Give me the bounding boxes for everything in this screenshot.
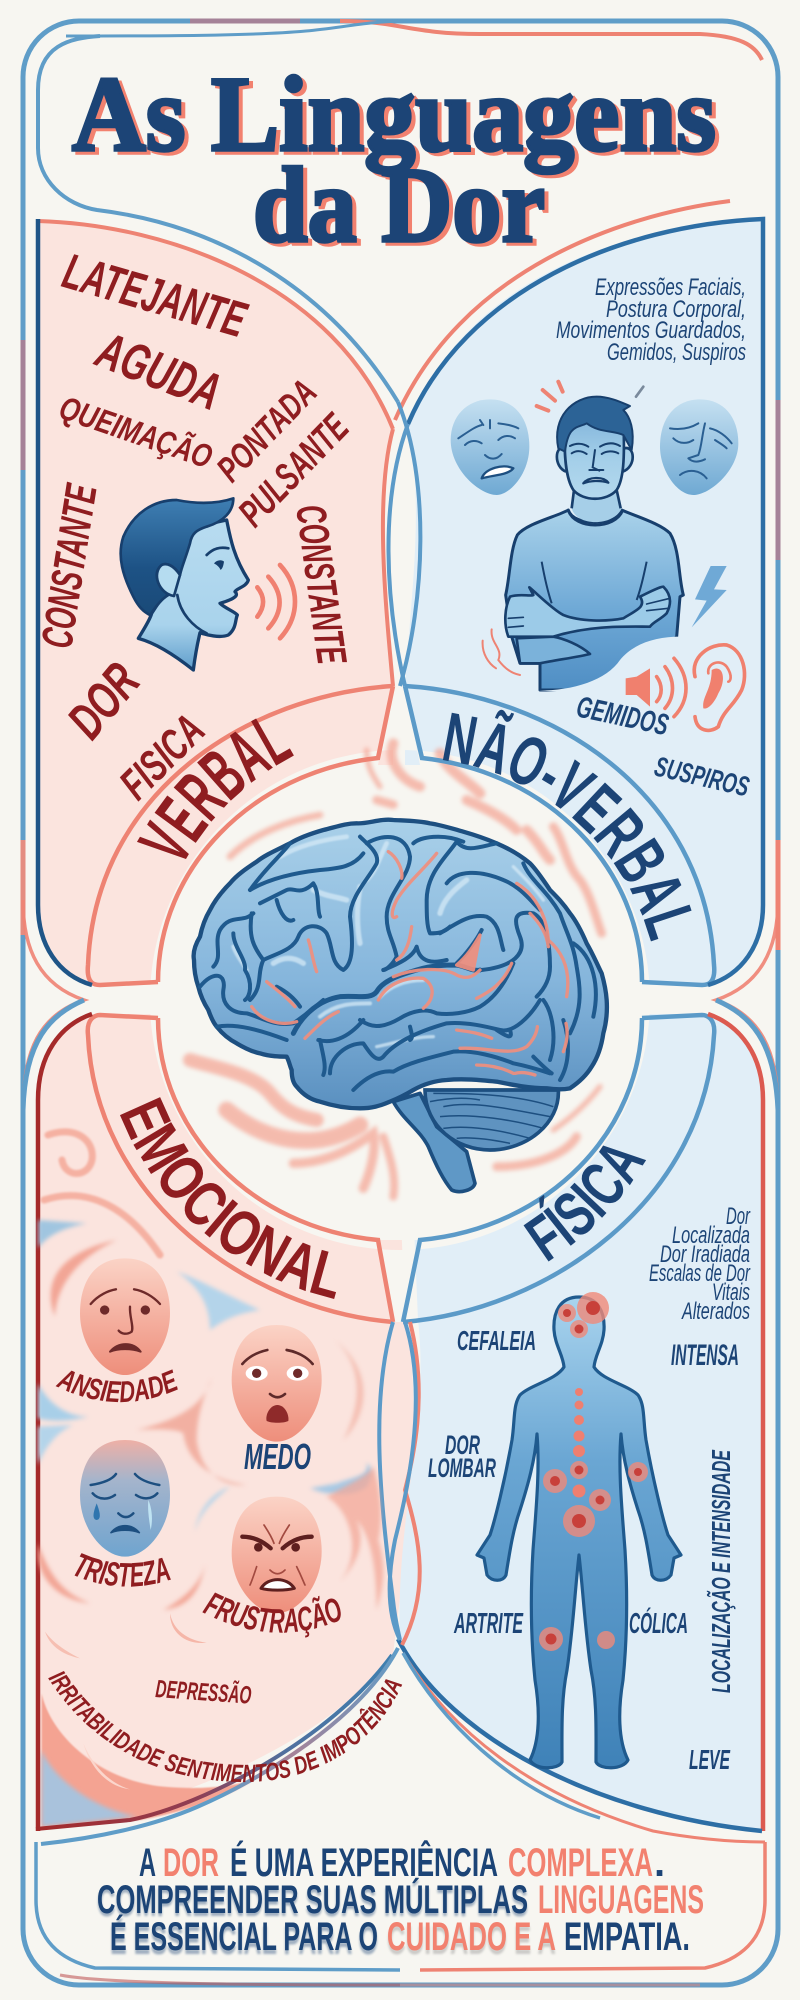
title: main text: As Linguagens [72, 56, 716, 174]
emotion labels: TRISTEZA [74, 1553, 171, 1587]
ring: physical arc [403, 1015, 714, 1322]
physical labels: LEVE [689, 1744, 731, 1775]
brain: main silhouette [194, 820, 607, 1108]
panel: non-verbal background [405, 219, 763, 985]
physical labels: ARTRITE [453, 1608, 524, 1640]
physical labels: INTENSA [671, 1339, 739, 1372]
emotion labels: DEPRESSÃO [155, 1673, 253, 1710]
ring: emotional arc [88, 1015, 393, 1322]
footer text: line one: A [139, 1841, 156, 1885]
brain: folds [200, 837, 596, 1090]
title: shadow [76, 59, 720, 268]
non-verbal description [556, 274, 746, 366]
footer text: ghost shadow: É ESSENCIAL PARA O [110, 1918, 378, 1963]
man: fingers [508, 598, 670, 627]
man: face [565, 420, 624, 499]
physical labels: DOR [445, 1430, 480, 1460]
footer text: line three: CUIDADO E A [387, 1915, 556, 1959]
title: shadow: da Dor [257, 150, 549, 268]
physical description: Alterados [681, 1298, 750, 1325]
physical description: Dor Iradiada [660, 1241, 750, 1268]
verbal word cloud: QUEIMAÇÃO [55, 389, 217, 475]
head: skin [138, 520, 248, 670]
icon: sound waves from mouth [257, 565, 295, 638]
man: crossed arms [505, 587, 670, 637]
centre cream circle and wedges [84, 686, 716, 1322]
icon: ear [694, 645, 745, 730]
panel: physical background [400, 1014, 763, 1831]
emotion labels: ANSIEDADE [56, 1369, 178, 1402]
footer text: ghost shadow: COMPREENDER SUAS MÚLTIPLAS [97, 1879, 528, 1925]
wisps around the brain [190, 743, 602, 1197]
footer text: ghost shadow: CUIDADO E A [387, 1919, 556, 1963]
panel: emotional background [38, 1014, 413, 1831]
physical description: Vitais [712, 1279, 750, 1306]
icon: speaking head [121, 498, 295, 670]
icon: brain [194, 820, 607, 1192]
footer text: line one: COMPLEXA [508, 1841, 653, 1885]
panel: footer box [36, 1842, 765, 1985]
title [72, 56, 720, 268]
physical labels [428, 1325, 739, 1775]
man: neck [572, 488, 622, 522]
icon: body outline with pain points [477, 1292, 681, 1768]
head: ear [157, 564, 180, 596]
face: sadness [80, 1440, 170, 1557]
footer text: line three: EMPATIA. [564, 1915, 690, 1959]
footer text: line one: É UMA EXPERIÊNCIA [230, 1839, 498, 1885]
ring label: verbal: VERBAL [137, 718, 294, 859]
brain: stem [393, 1093, 475, 1192]
verbal word cloud: PULSANTE [231, 406, 358, 535]
brain: pain veins [252, 852, 568, 1075]
emotion labels [48, 1369, 402, 1782]
non-verbal description: Postura Corporal, [606, 296, 746, 323]
head: jaw, brow and eye [177, 548, 228, 633]
swirl: frustration tail [170, 1613, 207, 1643]
man: collar line [568, 490, 623, 525]
swirl: corner blue wash [42, 1750, 137, 1827]
body: silhouette [477, 1297, 681, 1768]
label: medo: MEDO [244, 1436, 311, 1477]
ring label: emocional: EMOCIONAL [120, 1097, 336, 1299]
icon: lightning bolt [692, 566, 727, 627]
non-verbal labels: SUSPIROS [652, 751, 752, 802]
footer text: line one: DOR [163, 1841, 219, 1885]
verbal word cloud: FISICA [110, 705, 214, 809]
physical labels: CÓLICA [629, 1606, 688, 1640]
man: hair [557, 397, 633, 452]
verbal word cloud: CONSTANTE [32, 480, 107, 652]
ring label: física: FÍSICA [524, 1146, 646, 1262]
pain tick [636, 387, 643, 397]
physical labels: LOMBAR [428, 1453, 496, 1483]
verbal word cloud [32, 243, 358, 809]
swirl: right side flame [327, 1467, 383, 1610]
face: frustration [232, 1497, 322, 1613]
physical labels: LOCALIZAÇÃO E INTENSIDADE [706, 1450, 736, 1693]
title: shadow: As Linguagens [76, 59, 720, 177]
man: ears [557, 448, 633, 472]
swirl: pale streak [83, 1743, 130, 1789]
body: spine dots [572, 1388, 586, 1498]
emotional illustration [38, 1220, 383, 1613]
physical description: Localizada [672, 1222, 750, 1249]
swirl: top left spiral [44, 1132, 160, 1255]
footer text: line two: COMPREENDER SUAS MÚLTIPLAS [97, 1876, 528, 1922]
verbal word cloud: PONTADA [208, 371, 325, 490]
verbal word cloud: AGUDA [87, 321, 229, 422]
non-verbal illustration [451, 382, 745, 730]
non-verbal labels: GEMIDOS [574, 691, 671, 742]
man: grimacing mouth [583, 478, 608, 483]
centre braided vertical lines [379, 402, 420, 1645]
physical description [649, 1203, 751, 1325]
physical labels: CEFALEIA [457, 1325, 536, 1356]
title: main text: da Dor [253, 147, 545, 265]
pain marks [537, 382, 563, 411]
footer text: ghost shadow [97, 1879, 556, 1963]
man: lower arm [517, 637, 590, 663]
footer text: line one: . [654, 1841, 665, 1885]
swirl: left edge streak [45, 1632, 80, 1658]
ring: non-verbal arc [405, 686, 714, 985]
footer text: line three: É ESSENCIAL PARA O [110, 1914, 378, 1959]
emotion labels: IRRITABILIDADE SENTIMENTOS DE IMPOTÊNCIA [48, 1671, 402, 1782]
swirl: lower left salmon band [42, 1613, 253, 1827]
non-verbal labels [574, 691, 752, 802]
emotion labels: FRUSTRAÇÃO [202, 1592, 341, 1638]
face: fear [232, 1325, 322, 1442]
pain wiggles [483, 629, 520, 675]
brain: light highlights [233, 837, 543, 1047]
man: torso [506, 510, 683, 690]
man: arm folds [542, 562, 647, 603]
face: anxiety [80, 1258, 170, 1375]
icon: speaker [626, 658, 686, 717]
bubble behind sound icon [539, 627, 707, 713]
swirls between the emotion bubbles [38, 1220, 372, 1610]
man: facial features [570, 443, 620, 471]
verbal word cloud: CONSTANTE [287, 502, 356, 668]
footer text [97, 1839, 704, 1963]
panel: verbal background [38, 221, 393, 985]
verbal word cloud: LATEJANTE [57, 243, 253, 348]
body: pain halos [539, 1292, 648, 1651]
head: hair [121, 498, 233, 615]
icon: grimacing mask [451, 399, 529, 495]
brain: cerebellum [425, 1090, 558, 1150]
title: main text [72, 56, 716, 265]
icon: sad mask [660, 399, 738, 495]
physical description: Dor [726, 1203, 751, 1230]
body: pain cores [546, 1301, 642, 1644]
verbal word cloud: DOR [57, 652, 152, 750]
ring label: não-verbal: NÃO-VERBAL [443, 710, 692, 942]
footer text: line two: LINGUAGENS [538, 1878, 704, 1922]
ring: verbal arc [88, 686, 393, 985]
